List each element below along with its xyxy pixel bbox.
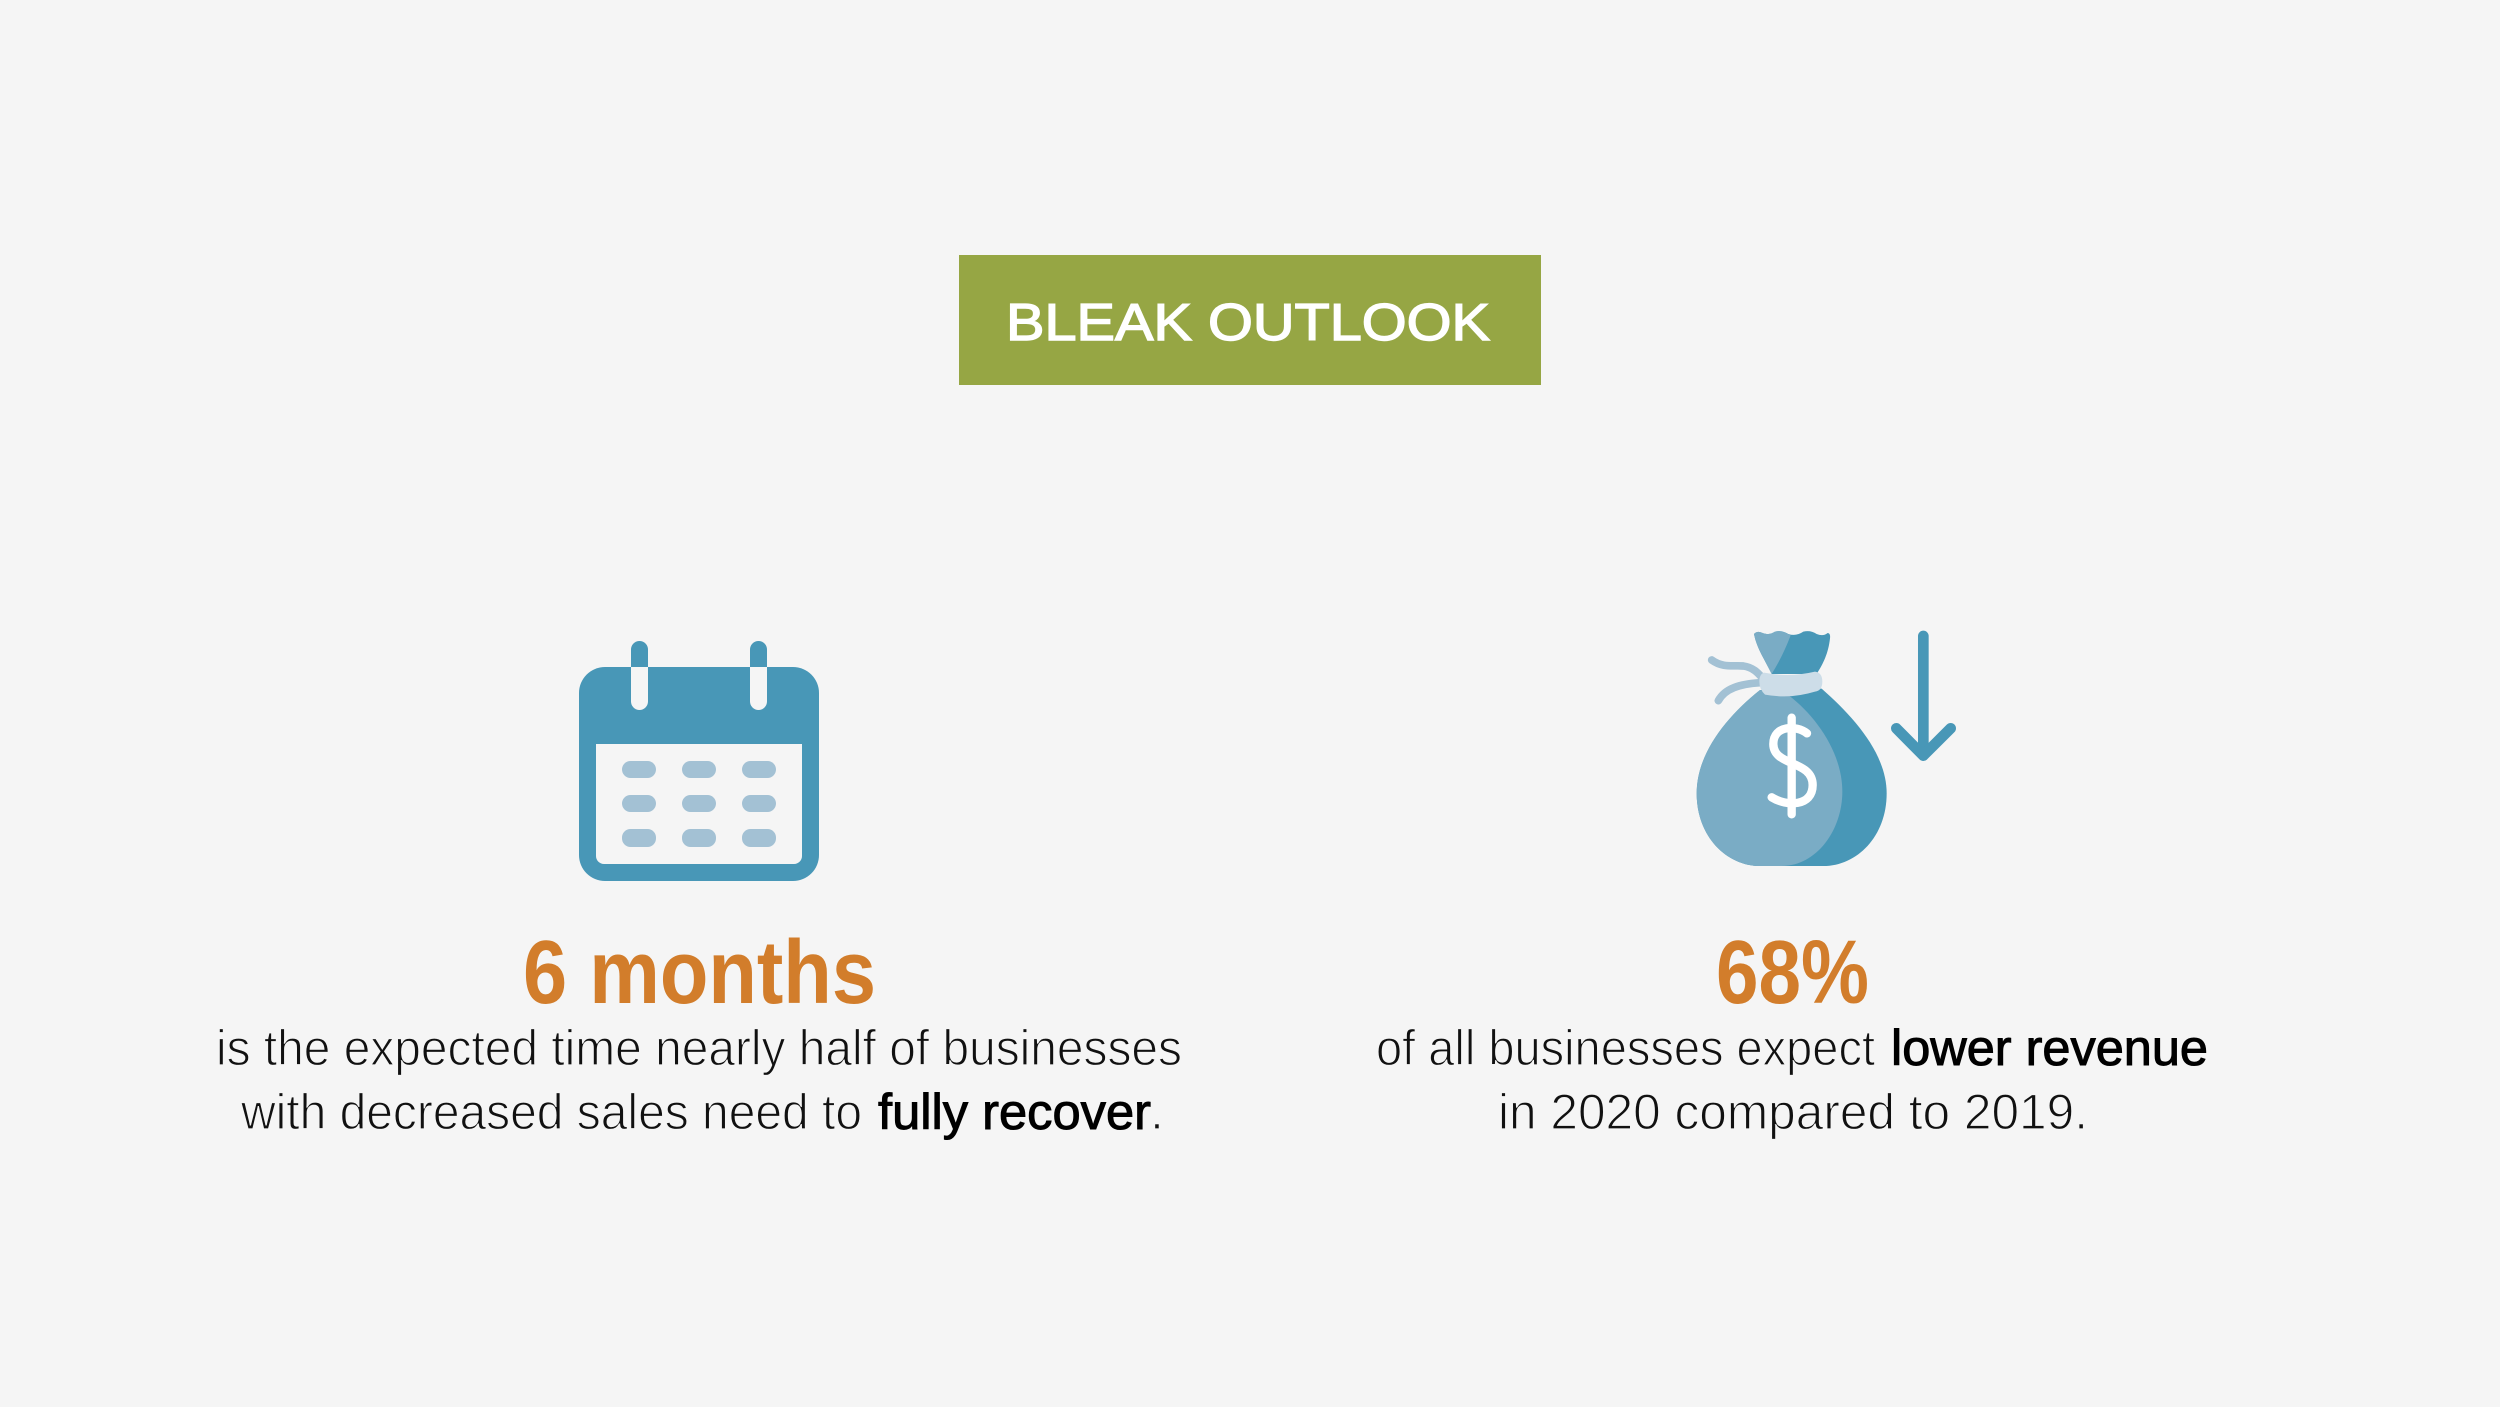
title banner: BLEAK OUTLOOK [1006, 294, 1490, 352]
stat: 6 months: 6 months [523, 923, 876, 1023]
text block: recovery time description: with decreased sales need to [240, 1084, 862, 1140]
icon: money bag with down arrow [1697, 631, 1951, 866]
text block: revenue description: in 2020 compared to 2019. [1498, 1084, 2088, 1140]
title banner [959, 255, 1541, 385]
text block: recovery time description: is the expected time nearly half of businesses [216, 1020, 1182, 1076]
stat: 68%: 68% [1716, 923, 1869, 1023]
text block: revenue description [1376, 1020, 2208, 1140]
text block: revenue description: lower revenue [1891, 1020, 2208, 1076]
icon: calendar [579, 641, 819, 881]
text block: recovery time description: fully recover [878, 1084, 1151, 1140]
text block: revenue description: of all businesses expect [1376, 1020, 1875, 1076]
text block: recovery time description [216, 1020, 1182, 1140]
text block: recovery time description: . [1150, 1084, 1164, 1140]
